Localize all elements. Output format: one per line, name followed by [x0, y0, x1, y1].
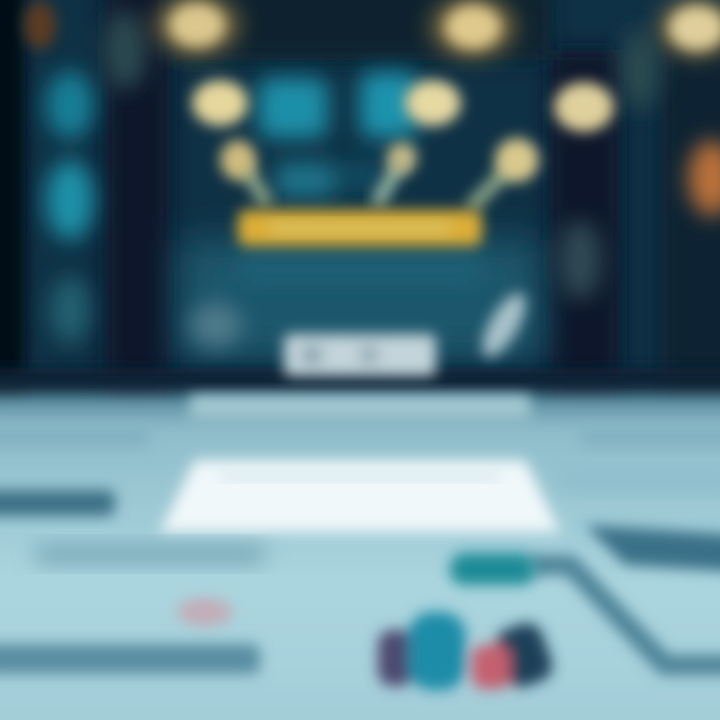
block: right dark strip: [585, 525, 720, 572]
panel: central white text card: [160, 460, 560, 532]
icon: left leaf mark: [190, 303, 242, 347]
icon: pink mark: [177, 598, 233, 626]
panel: dark upper background: [0, 0, 720, 420]
block: lower left strip: [35, 544, 265, 564]
icon: crown points: [220, 138, 539, 208]
panel: light lower background: [0, 394, 720, 720]
icon: ceiling lights: [24, 0, 720, 132]
arrow: diagonal connector: [530, 565, 720, 665]
block: bottom left strip: [0, 644, 260, 674]
icon: teal side panels: [46, 10, 660, 344]
heading: blurred title text: [284, 334, 436, 376]
icon: crown band: [238, 210, 482, 246]
block: left dark strip: [0, 490, 115, 516]
icon: orange side light: [688, 140, 720, 216]
chart: coloured bottom bars: [378, 612, 557, 691]
icon: right feather mark: [474, 287, 534, 363]
icon: teal crown panels: [240, 72, 480, 285]
block: right pale strip: [560, 470, 720, 490]
icon: teal pill: [450, 553, 535, 585]
